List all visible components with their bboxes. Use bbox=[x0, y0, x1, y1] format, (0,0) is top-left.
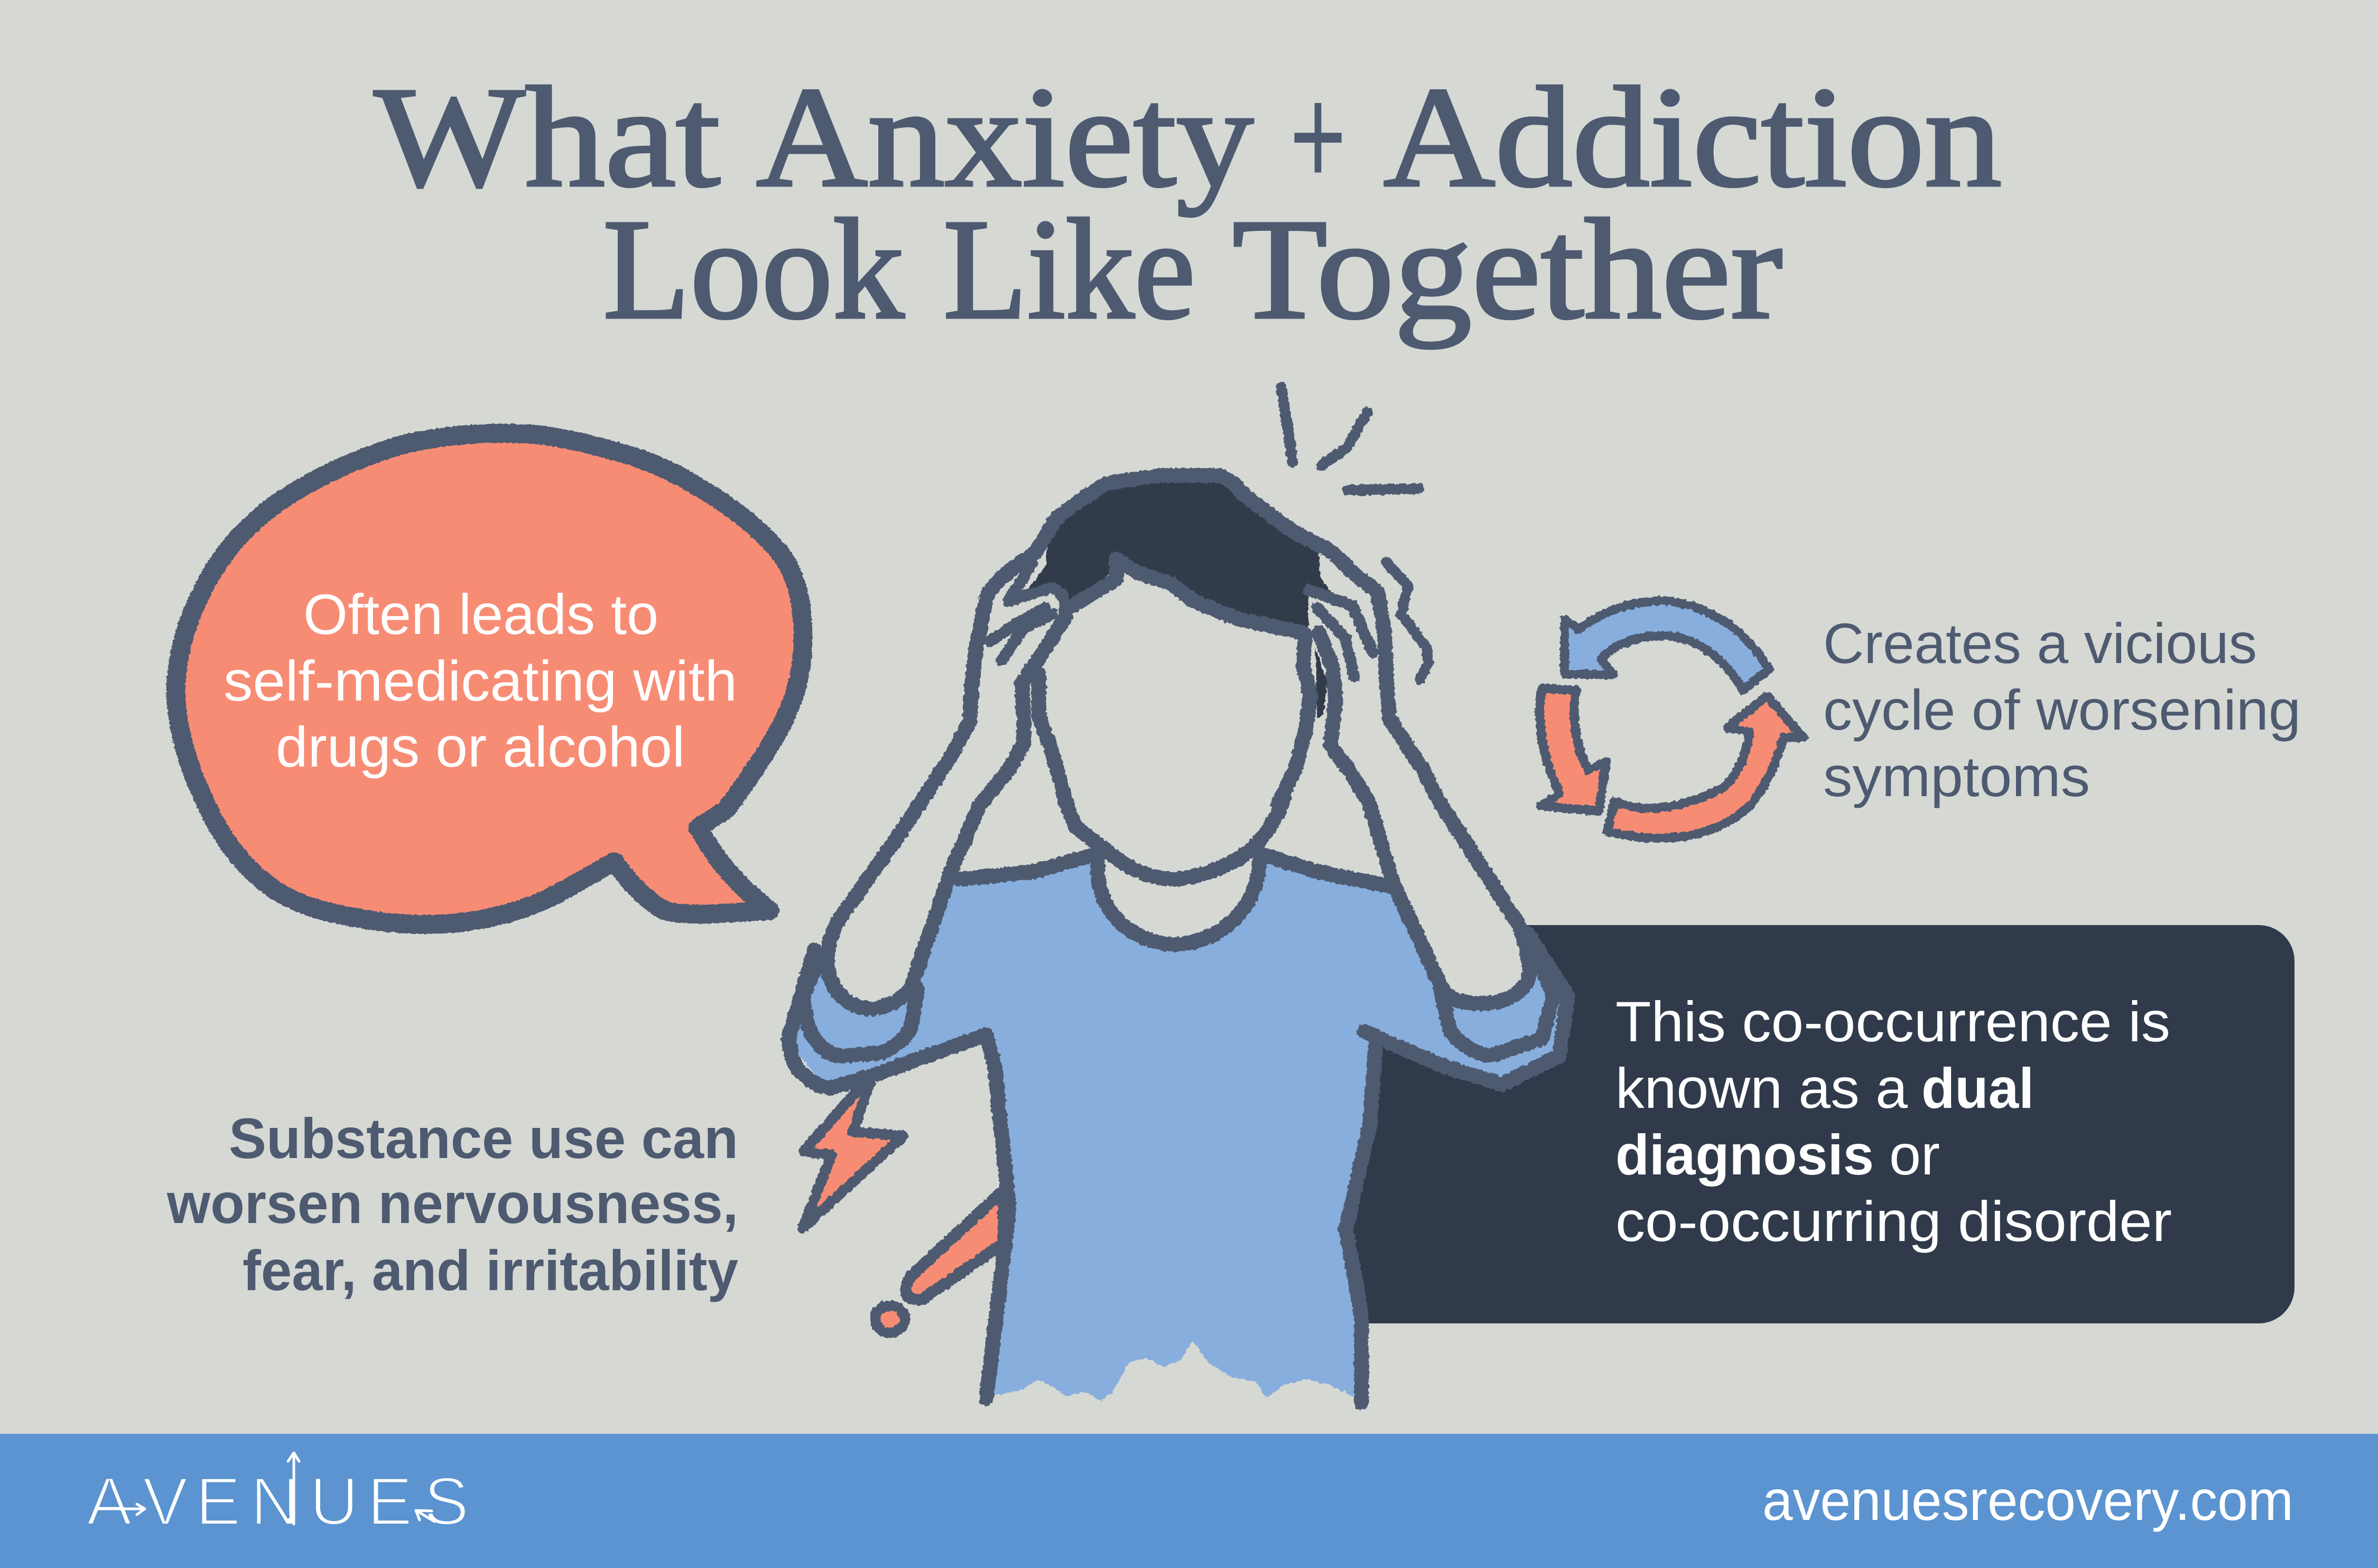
dual diagnosis text: co-occurring disorder bbox=[1615, 1189, 2172, 1253]
left arm fill bbox=[827, 642, 1029, 1009]
logo arrows bbox=[97, 1453, 434, 1524]
face right and arm bbox=[1278, 632, 1369, 803]
title: Like bbox=[943, 190, 1195, 349]
left fingers bbox=[990, 563, 1066, 660]
cycle text: symptoms bbox=[1823, 744, 2090, 808]
head and hands bbox=[948, 475, 1440, 803]
cycle text: cycle of worsening bbox=[1823, 678, 2301, 742]
title: Addiction bbox=[1383, 58, 2002, 217]
hair and hand outline bbox=[948, 475, 1440, 803]
cycle text bbox=[1823, 611, 2301, 808]
collar bbox=[1098, 858, 1259, 944]
website url: avenuesrecovery.com bbox=[1762, 1468, 2293, 1532]
right fingers bbox=[1308, 590, 1373, 677]
shirt bbox=[788, 854, 1568, 1403]
substance use text bbox=[166, 1106, 738, 1302]
neck fill bbox=[1098, 819, 1259, 944]
arrow: blue bbox=[1565, 601, 1769, 690]
substance use text: Substance use can bbox=[229, 1106, 738, 1170]
face and left hand bbox=[981, 617, 1066, 803]
shoulder lines bbox=[960, 853, 1390, 886]
dual diagnosis text: or bbox=[1889, 1123, 1940, 1187]
right arm outline bbox=[1369, 803, 1529, 1004]
substance use text: fear, and irritability bbox=[243, 1238, 738, 1302]
dual diagnosis text: dual bbox=[1921, 1056, 2034, 1120]
right sleeve bbox=[1346, 934, 1568, 1403]
title: What bbox=[374, 58, 721, 217]
illustration: anxious person bbox=[788, 388, 1568, 1403]
title: Together bbox=[1232, 190, 1782, 349]
logo: Avenues: AVENUES bbox=[87, 1464, 469, 1539]
cycle text: Creates a vicious bbox=[1823, 611, 2257, 675]
icon: cycle arrows bbox=[1540, 601, 1804, 838]
dual diagnosis text bbox=[1615, 990, 2172, 1253]
substance use text: worsen nervousness, bbox=[166, 1171, 738, 1235]
left sleeve bbox=[788, 950, 1009, 1399]
title: Look bbox=[603, 190, 904, 349]
icon: exclamation bar bbox=[906, 1190, 1004, 1300]
bubble text bbox=[224, 582, 737, 779]
title bbox=[374, 58, 2002, 349]
title: + bbox=[1290, 58, 1345, 217]
dual diagnosis text: diagnosis bbox=[1615, 1123, 1874, 1187]
bubble text: Often leads to bbox=[303, 582, 658, 646]
hair back bbox=[1315, 648, 1327, 718]
icon: lightning bolt bbox=[803, 1070, 903, 1228]
dual diagnosis text: known as a bbox=[1615, 1056, 1908, 1120]
panel: dark callout box bbox=[1353, 925, 2295, 1323]
speech bubble bbox=[176, 433, 803, 925]
right arm fill bbox=[1324, 572, 1529, 1004]
dual diagnosis text: This co-occurrence is bbox=[1615, 990, 2170, 1053]
stress marks bbox=[1281, 388, 1419, 490]
bubble text: drugs or alcohol bbox=[276, 715, 685, 779]
title: Anxiety bbox=[756, 58, 1253, 217]
hair bbox=[1020, 480, 1334, 630]
icon: exclamation dot bbox=[875, 1306, 905, 1332]
arrow: coral left bbox=[1540, 688, 1606, 811]
left arm outline bbox=[827, 761, 981, 1009]
squiggle bbox=[1386, 562, 1428, 679]
footer band bbox=[0, 1434, 2378, 1568]
lower face outline bbox=[1066, 798, 1284, 879]
hairline bbox=[1066, 559, 1302, 632]
arrow: coral bottom bbox=[1607, 696, 1804, 838]
bubble text: self-medicating with bbox=[224, 649, 737, 713]
